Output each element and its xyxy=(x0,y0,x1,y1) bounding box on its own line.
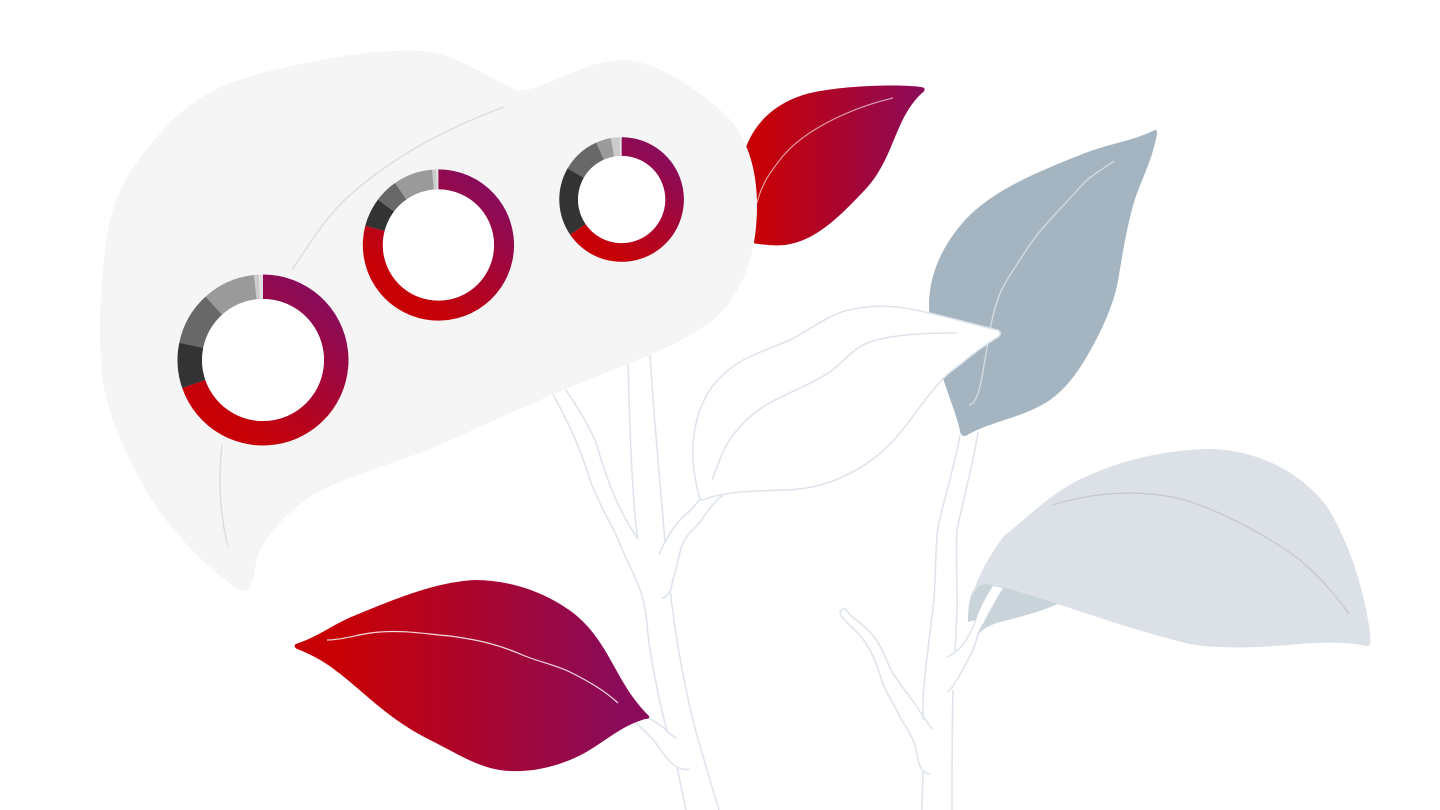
blob vein: lower xyxy=(220,445,228,547)
leaf: bottom red xyxy=(295,580,649,771)
stems: right plant xyxy=(840,432,1003,810)
blob vein: upper xyxy=(292,107,504,270)
donut chart: large xyxy=(178,274,348,446)
leaf: pale right with fold xyxy=(968,449,1370,647)
donut chart: medium xyxy=(363,169,514,321)
stems: left plant xyxy=(548,355,723,810)
background blob panel xyxy=(100,51,757,591)
leaf: slate blue xyxy=(929,130,1157,436)
leaf: white outline xyxy=(693,306,1000,500)
leaf: top red xyxy=(745,85,925,245)
donut chart: small xyxy=(559,137,684,262)
